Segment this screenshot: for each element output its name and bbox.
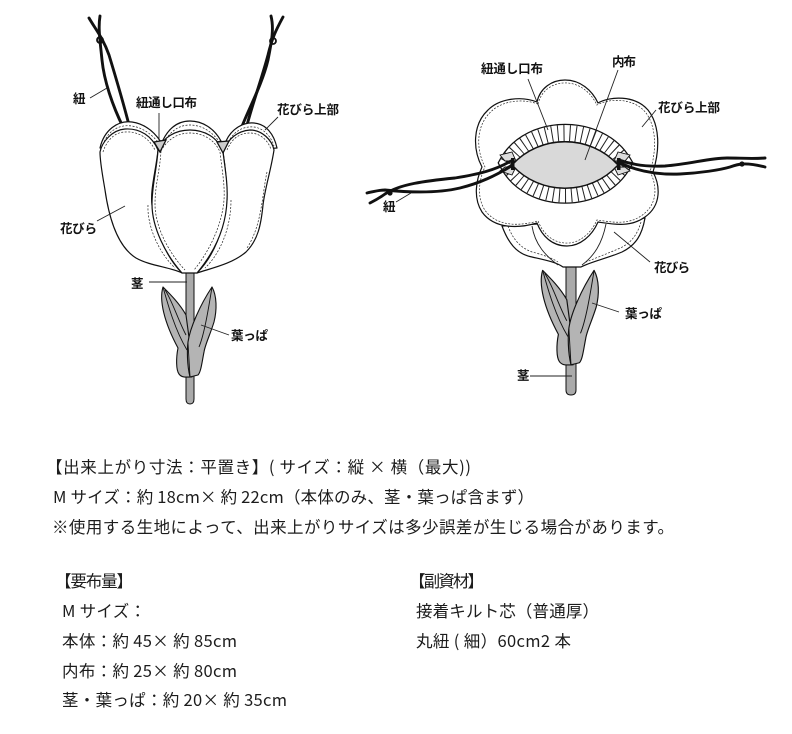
gathered ruffle [500,133,630,194]
diagram labels: 花びら上部 [277,99,339,118]
text block: sub materials [409,568,599,652]
text block: sub materials: 丸紐 ( 細）60cm2 本 [416,628,572,652]
text block: required fabric: 内布：約 25× 約 80cm [62,658,237,682]
leader lines [90,70,656,376]
diagram labels [60,51,720,384]
stem [186,272,194,404]
inner cloth [512,142,618,188]
text block: required fabric: 【要布量】 [55,568,133,592]
cords [89,16,283,129]
diagram labels: 内布 [612,51,636,70]
center petal [152,130,227,273]
flower upper part [476,80,658,246]
diagram labels: 葉っぱ [625,303,662,322]
outer petals [100,129,274,273]
diagram labels: 花びら [60,218,97,237]
text block: required fabric: M サイズ： [62,598,146,622]
illustration: open top view of the bag [367,80,765,395]
back petals: upper part [100,121,277,150]
text block: sub materials: 接着キルト芯（普通厚） [416,598,599,622]
text block: finished size [46,454,674,538]
diagram labels: 紐 [73,88,86,107]
diagram labels: 茎 [517,365,530,384]
stem [566,262,576,395]
leaves [541,270,598,365]
diagram labels: 花びら [654,257,690,276]
diagram labels: 紐通し口布 [481,58,543,77]
text block: finished size: M サイズ：約 18cm× 約 22cm（本体のみ、茎・葉っぱ含まず） [53,484,534,508]
text block: sub materials: 【副資材】 [409,568,484,592]
cord opening cloth tabs [154,140,229,153]
diagram labels: 紐通し口布 [136,92,197,111]
diagram labels: 茎 [131,273,144,292]
petals under the flower [502,218,645,267]
diagram labels: 葉っぱ [231,325,268,344]
text block: required fabric [55,568,287,711]
illustration: closed tulip bag [89,16,283,404]
leaves [162,287,216,377]
diagram labels: 花びら上部 [658,97,720,116]
text block: required fabric: 茎・葉っぱ：約 20× 約 35cm [62,687,287,711]
text block: required fabric: 本体：約 45× 約 85cm [62,628,237,652]
text block: finished size: 【出来上がり寸法：平置き】( サイズ：縦 × 横（最大)) [46,454,471,478]
diagram labels: 紐 [383,196,396,215]
text block: finished size: ※使用する生地によって、出来上がりサイズは多少誤差が生じる場合があります。 [52,514,674,538]
cords [367,158,765,203]
